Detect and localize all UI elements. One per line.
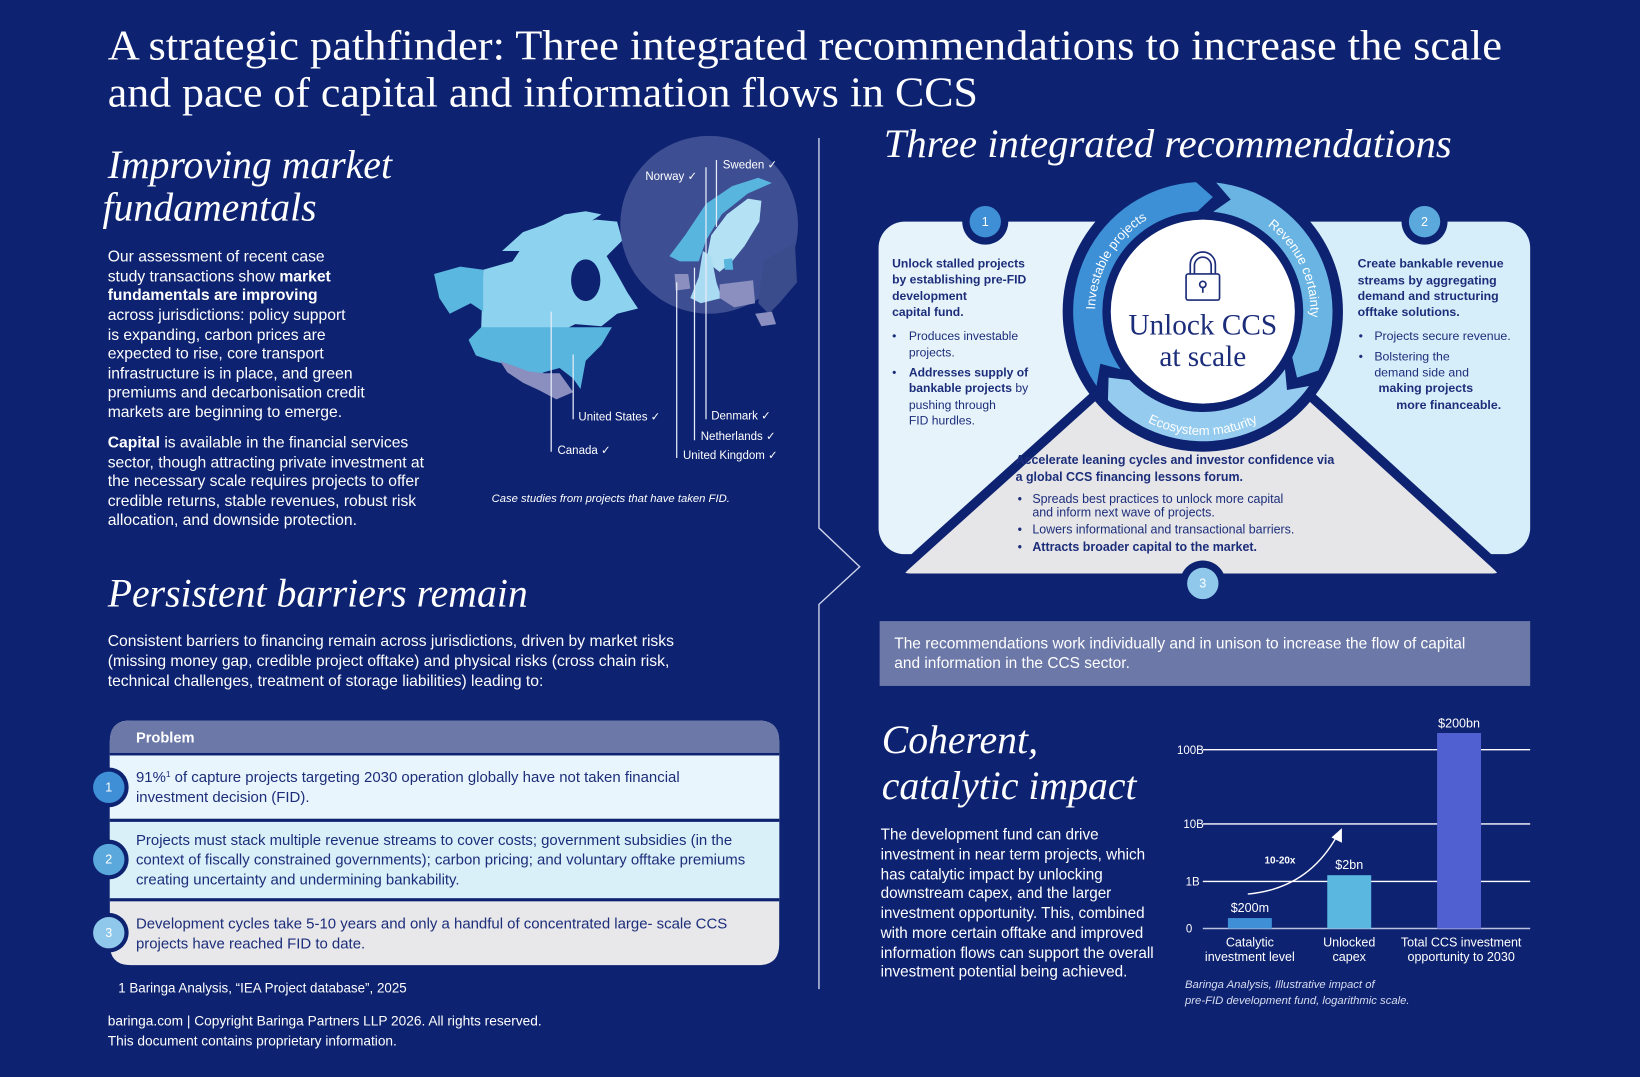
panel 3	[900, 298, 1502, 578]
heading: improving market fundamentals: fundamentals	[102, 186, 317, 230]
panel 2 text: demand and structuring	[1358, 289, 1499, 303]
text block: impact: investment in near term projects, which	[881, 847, 1145, 864]
footer: This document contains proprietary information.	[108, 1034, 397, 1049]
panel 3 text: •	[1018, 540, 1022, 554]
panel 1 text: FID hurdles.	[909, 414, 975, 428]
panel 2 text: Projects secure revenue.	[1374, 329, 1511, 343]
heading: improving market fundamentals: Improving market	[107, 143, 393, 187]
panel 3 text: •	[1018, 522, 1022, 536]
callout: recommendations work together	[880, 621, 1530, 686]
panel 1	[879, 222, 1213, 554]
panel 2 text: Create bankable revenue	[1358, 257, 1504, 271]
badges: 1	[982, 215, 989, 229]
panel 1 text: Addresses supply of	[909, 365, 1029, 379]
bar chart: 10B	[1183, 819, 1204, 831]
text block: market fundamentals: across jurisdictions: policy support	[108, 307, 346, 324]
text block: impact: The development fund can drive	[881, 827, 1099, 844]
text block: market fundamentals: study transactions show market	[108, 268, 332, 285]
ring: Investable projects	[1086, 214, 1146, 308]
bar chart: 100B	[1177, 745, 1204, 757]
panel 3 text: Lowers informational and transactional barriers.	[1032, 522, 1294, 536]
map: country labels: United Kingdom ✓	[683, 450, 778, 462]
ring: Ecosystem maturity	[1148, 414, 1256, 436]
map caption: Case studies from projects that have taken FID.	[492, 493, 730, 505]
text block: market fundamentals	[108, 248, 425, 529]
text block: impact: downstream capex, and the larger	[881, 885, 1111, 902]
text block: impact: has catalytic impact by unlocking	[881, 866, 1103, 883]
map: north america	[434, 211, 638, 399]
map: country labels: Sweden ✓	[723, 159, 777, 171]
text block: market fundamentals: fundamentals are improving	[108, 287, 318, 304]
text block: impact: with more certain offtake and improved	[880, 925, 1143, 942]
map: europe circle	[620, 136, 798, 326]
center label: Unlock CCS	[1128, 310, 1277, 342]
map: country labels: Denmark ✓	[711, 410, 771, 422]
panel 2 text	[1358, 257, 1511, 412]
panel 2 text: offtake solutions.	[1358, 305, 1460, 319]
map: country labels: Netherlands ✓	[701, 431, 776, 443]
divider with chevron	[819, 138, 860, 989]
text block: barriers: Consistent barriers to financing remain across jurisdictions, driven by market risks	[108, 633, 674, 650]
table: problem	[89, 720, 779, 965]
panel 2	[1192, 222, 1530, 554]
table rows text	[136, 769, 745, 952]
table number badges: 2	[105, 853, 112, 867]
title: A strategic pathfinder: Three integrated recommendations to increase the scale	[108, 24, 1502, 70]
map: country labels: Canada ✓	[557, 445, 611, 457]
chart caption: Baringa Analysis, Illustrative impact of	[1185, 979, 1376, 991]
map: country labels	[557, 159, 778, 462]
badges	[962, 199, 1448, 606]
bar chart: $2bn	[1335, 858, 1363, 872]
center label: at scale	[1159, 341, 1246, 373]
bar chart: 10-20x	[1265, 856, 1296, 867]
panel 3 text: Spreads best practices to unlock more capital	[1032, 492, 1283, 506]
footer	[108, 1014, 542, 1049]
table rows text: 91%	[136, 769, 166, 786]
table rows text: creating uncertainty and undermining bankability.	[136, 872, 460, 889]
panel 1 text: Unlock stalled projects	[892, 257, 1025, 271]
panel 3 text: Attracts broader capital to the market.	[1032, 540, 1257, 554]
panel 2 text: •	[1359, 329, 1363, 343]
panel 3 text: and inform next wave of projects.	[1032, 506, 1215, 520]
diagram: recommendations	[878, 182, 1530, 600]
table rows text: projects have reached FID to date.	[136, 935, 365, 952]
text block: market fundamentals: expected to rise, core transport	[108, 346, 324, 363]
text block: market fundamentals: Capital is available in the financial services	[108, 435, 408, 452]
panel 3 text: •	[1018, 492, 1022, 506]
panel 1 text: development	[892, 289, 967, 303]
arrow: 10-20x	[1248, 837, 1337, 894]
badges: 2	[1421, 215, 1428, 229]
text block: market fundamentals: allocation, and downside protection.	[108, 512, 357, 529]
panel 1 text: by establishing pre-FID	[892, 272, 1026, 286]
heading: coherent catalytic impact: catalytic impact	[882, 764, 1137, 808]
table rows text: of capture projects targeting 2030 operation globally have not taken financial	[171, 769, 680, 786]
bar chart: Catalytic	[1226, 935, 1274, 949]
badges: 3	[1199, 577, 1206, 591]
text block: market fundamentals: the necessary scale requires projects to offer	[108, 473, 419, 490]
text block: market fundamentals: is expanding, carbon prices are	[108, 327, 326, 344]
map: country labels: United States ✓	[578, 411, 660, 423]
panel 2 text: making projects	[1379, 381, 1473, 395]
heading: coherent catalytic impact	[882, 718, 1137, 808]
text block: impact: investment potential being achieved.	[881, 964, 1127, 981]
panel 3 text: Accelerate leaning cycles and investor confidence via	[1016, 453, 1334, 467]
bar chart: 0	[1186, 924, 1192, 936]
bar chart: Total CCS investment	[1401, 935, 1522, 949]
text block: impact: investment opportunity. This, combined	[881, 905, 1145, 922]
bar chart: 1B	[1186, 877, 1200, 889]
panel 1 text: projects.	[909, 346, 955, 360]
panel 1 text: Produces investable	[909, 329, 1018, 343]
center label	[1128, 310, 1277, 373]
panel 1 text: •	[892, 329, 896, 343]
text block: market fundamentals: Our assessment of recent case	[108, 248, 325, 265]
bar chart: Unlocked	[1323, 935, 1375, 949]
table number badges: 3	[105, 926, 112, 940]
panel 1 text: pushing through	[909, 398, 996, 412]
chart caption	[1184, 979, 1410, 1007]
footer: baringa.com | Copyright Baringa Partners LLP 2026. All rights reserved.	[108, 1014, 542, 1029]
bar chart: $200bn	[1438, 717, 1480, 731]
panel 1 text: •	[892, 365, 896, 379]
panel 3 text	[1016, 453, 1334, 554]
ring: Revenue certainty	[1268, 219, 1320, 318]
icon: padlock	[1186, 252, 1220, 300]
text block: market fundamentals: sector, though attracting private investment at	[108, 454, 425, 471]
panel 2 text: Bolstering the	[1374, 350, 1450, 364]
title: and pace of capital and information flows in CCS	[108, 71, 978, 117]
footnote: 1 Baringa Analysis, “IEA Project database”, 2025	[118, 980, 407, 995]
chart caption: pre-FID development fund, logarithmic scale.	[1184, 995, 1410, 1007]
bar chart: capex	[1333, 950, 1367, 964]
text block: market fundamentals: premiums and decarbonisation credit	[108, 384, 365, 401]
panel 2 text: more financeable.	[1396, 398, 1501, 412]
text block: barriers: technical challenges, treatment of storage liabilities) leading to:	[108, 673, 543, 690]
map: country labels: Norway ✓	[645, 171, 697, 183]
map: leader lines	[551, 160, 716, 458]
callout: recommendations work together: and information in the CCS sector.	[894, 655, 1130, 672]
panel 2 text: •	[1359, 350, 1363, 364]
bar chart	[1177, 717, 1530, 1007]
text block: impact: information flows can support the overall	[881, 945, 1154, 962]
panel 1 text: capital fund.	[892, 305, 964, 319]
panel 3 text: a global CCS financing lessons forum.	[1016, 470, 1243, 484]
text block: market fundamentals: markets are beginning to emerge.	[108, 404, 342, 421]
ring	[1062, 182, 1343, 452]
heading: improving market fundamentals	[102, 143, 393, 230]
heading: coherent catalytic impact: Coherent,	[882, 718, 1038, 762]
map: case study countries	[434, 136, 798, 505]
table rows text: context of fiscally constrained governments); carbon pricing; and voluntary offtake premiums	[136, 852, 745, 869]
table header: Problem	[136, 730, 194, 746]
text block: barriers	[108, 633, 674, 690]
text block: market fundamentals: credible returns, stable revenues, robust risk	[108, 493, 416, 510]
table rows text: investment decision (FID).	[136, 789, 309, 806]
text block: impact	[880, 827, 1154, 981]
bar chart: investment level	[1205, 950, 1295, 964]
heading: three integrated recommendations: Three integrated recommendations	[884, 122, 1452, 166]
callout: recommendations work together: The recommendations work individually and in unison to increase the flow of capital	[894, 635, 1465, 652]
bar chart: $200m	[1231, 901, 1269, 915]
bar chart: opportunity to 2030	[1407, 950, 1515, 964]
panel 1 text	[892, 257, 1029, 428]
table rows text: 1	[166, 769, 171, 779]
table number badges	[89, 767, 129, 953]
table rows text: Projects must stack multiple revenue streams to cover costs; government subsidies (in the	[136, 832, 732, 849]
text block: barriers: (missing money gap, credible project offtake) and physical risks (cross chain risk,	[108, 653, 669, 670]
table number badges: 1	[105, 781, 112, 795]
panel 2 text: streams by aggregating	[1358, 273, 1497, 287]
heading: persistent barriers: Persistent barriers remain	[107, 571, 528, 615]
panel 1 text: bankable projects by	[909, 381, 1029, 395]
table rows text: Development cycles take 5-10 years and only a handful of concentrated large- scale CCS	[136, 916, 727, 933]
panel 2 text: demand side and	[1374, 365, 1469, 379]
title	[108, 24, 1502, 117]
text block: market fundamentals: infrastructure is in place, and green	[108, 366, 353, 383]
